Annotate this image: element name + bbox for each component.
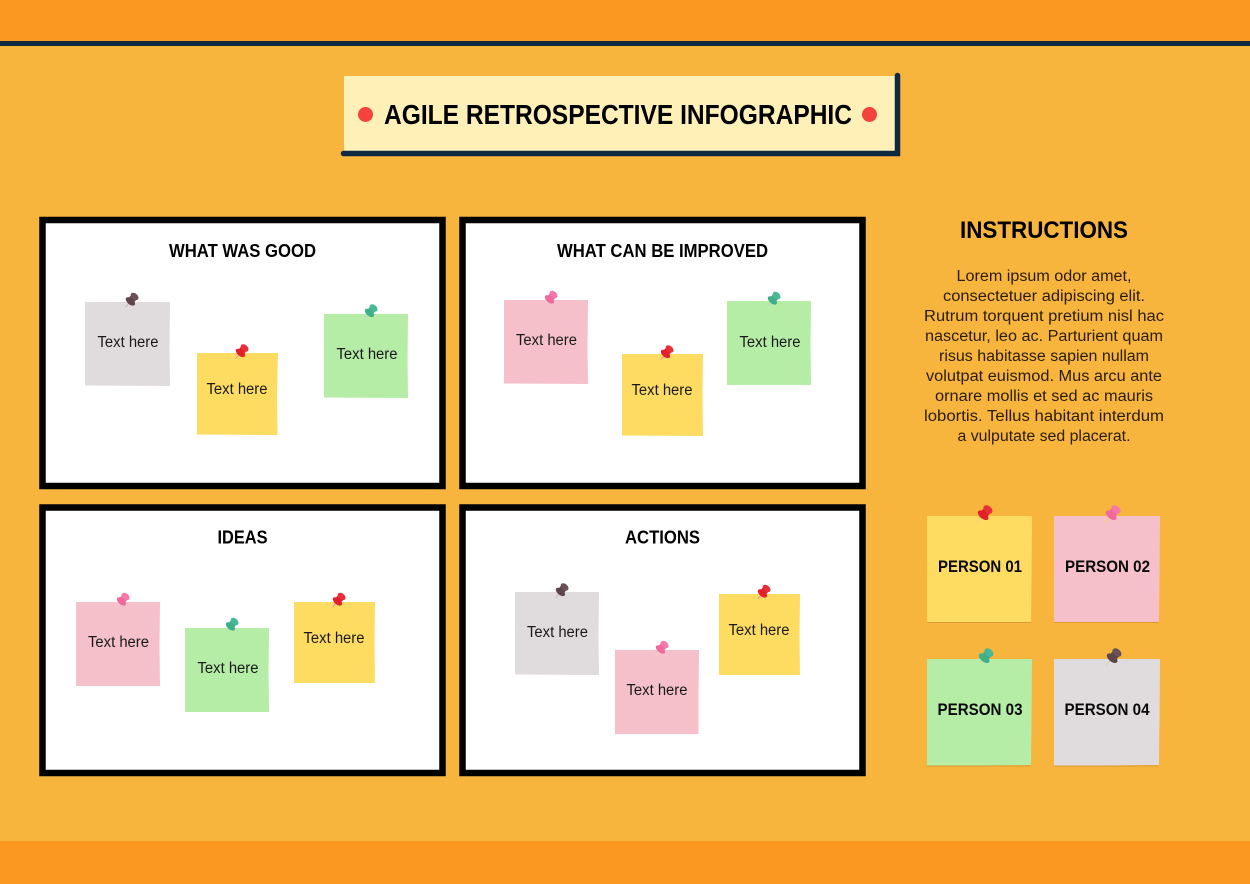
note: green: Text here (336, 346, 398, 363)
note: yellow (197, 342, 278, 435)
instructions text: volutpat euismod. Mus arcu ante (926, 368, 1162, 385)
instructions heading: INSTRUCTIONS (960, 217, 1128, 244)
note: person 01: PERSON 01 (938, 558, 1022, 576)
heading: WHAT CAN BE IMPROVED (557, 241, 768, 261)
instructions text: ornare mollis et sed ac mauris (935, 388, 1153, 405)
bottom banner (0, 841, 1250, 884)
note: person 04: PERSON 04 (1064, 701, 1150, 719)
heading: IDEAS (218, 528, 268, 548)
instructions text (924, 268, 1164, 445)
note: yellow: Text here (206, 381, 268, 398)
heading: ACTIONS (625, 528, 700, 548)
note: yellow (622, 343, 703, 436)
panel: ideas (42, 508, 442, 773)
note: pink (76, 591, 160, 686)
note: green: Text here (740, 334, 800, 351)
note: person 03 (927, 646, 1032, 766)
instructions text: Rutrum torquent pretium nisl hac (924, 308, 1164, 325)
note: yellow (719, 583, 800, 675)
note: pink (615, 639, 699, 734)
title banner (344, 76, 898, 154)
note: yellow: Text here (304, 630, 364, 647)
note: yellow: Text here (632, 382, 692, 399)
panel: what can be improved (462, 220, 862, 486)
note: grey: Text here (98, 334, 158, 351)
note: yellow (294, 591, 375, 683)
note: person 03: PERSON 03 (938, 701, 1022, 719)
note: green: Text here (198, 660, 258, 677)
instructions text: Lorem ipsum odor amet, (956, 268, 1132, 285)
heading: WHAT WAS GOOD (169, 241, 316, 261)
panel: what was good (42, 220, 442, 486)
note: grey: Text here (527, 624, 588, 641)
note: pink: Text here (88, 634, 149, 651)
note: pink: Text here (626, 682, 688, 699)
note: green (185, 616, 269, 712)
note: grey (85, 291, 170, 386)
note: grey (515, 581, 599, 675)
note: pink: Text here (516, 332, 577, 349)
note: person 02 (1054, 503, 1160, 622)
panel: actions (462, 508, 862, 773)
instructions text: a vulputate sed placerat. (958, 428, 1130, 445)
title: AGILE RETROSPECTIVE INFOGRAPHIC (384, 99, 852, 130)
instructions text: risus habitasse sapien nullam (939, 348, 1149, 365)
instructions text: lobortis. Tellus habitant interdum (924, 408, 1164, 425)
note: pink (504, 289, 588, 384)
instructions text: consectetuer adipiscing elit. (943, 288, 1145, 305)
instructions text: nascetur, leo ac. Parturient quam (925, 328, 1163, 345)
note: person 02: PERSON 02 (1065, 558, 1150, 576)
note: green (324, 302, 408, 398)
note: person 04 (1054, 646, 1160, 766)
note: green (727, 290, 811, 385)
note: yellow: Text here (728, 622, 790, 639)
top banner (0, 0, 1250, 46)
note: person 01 (927, 503, 1032, 623)
